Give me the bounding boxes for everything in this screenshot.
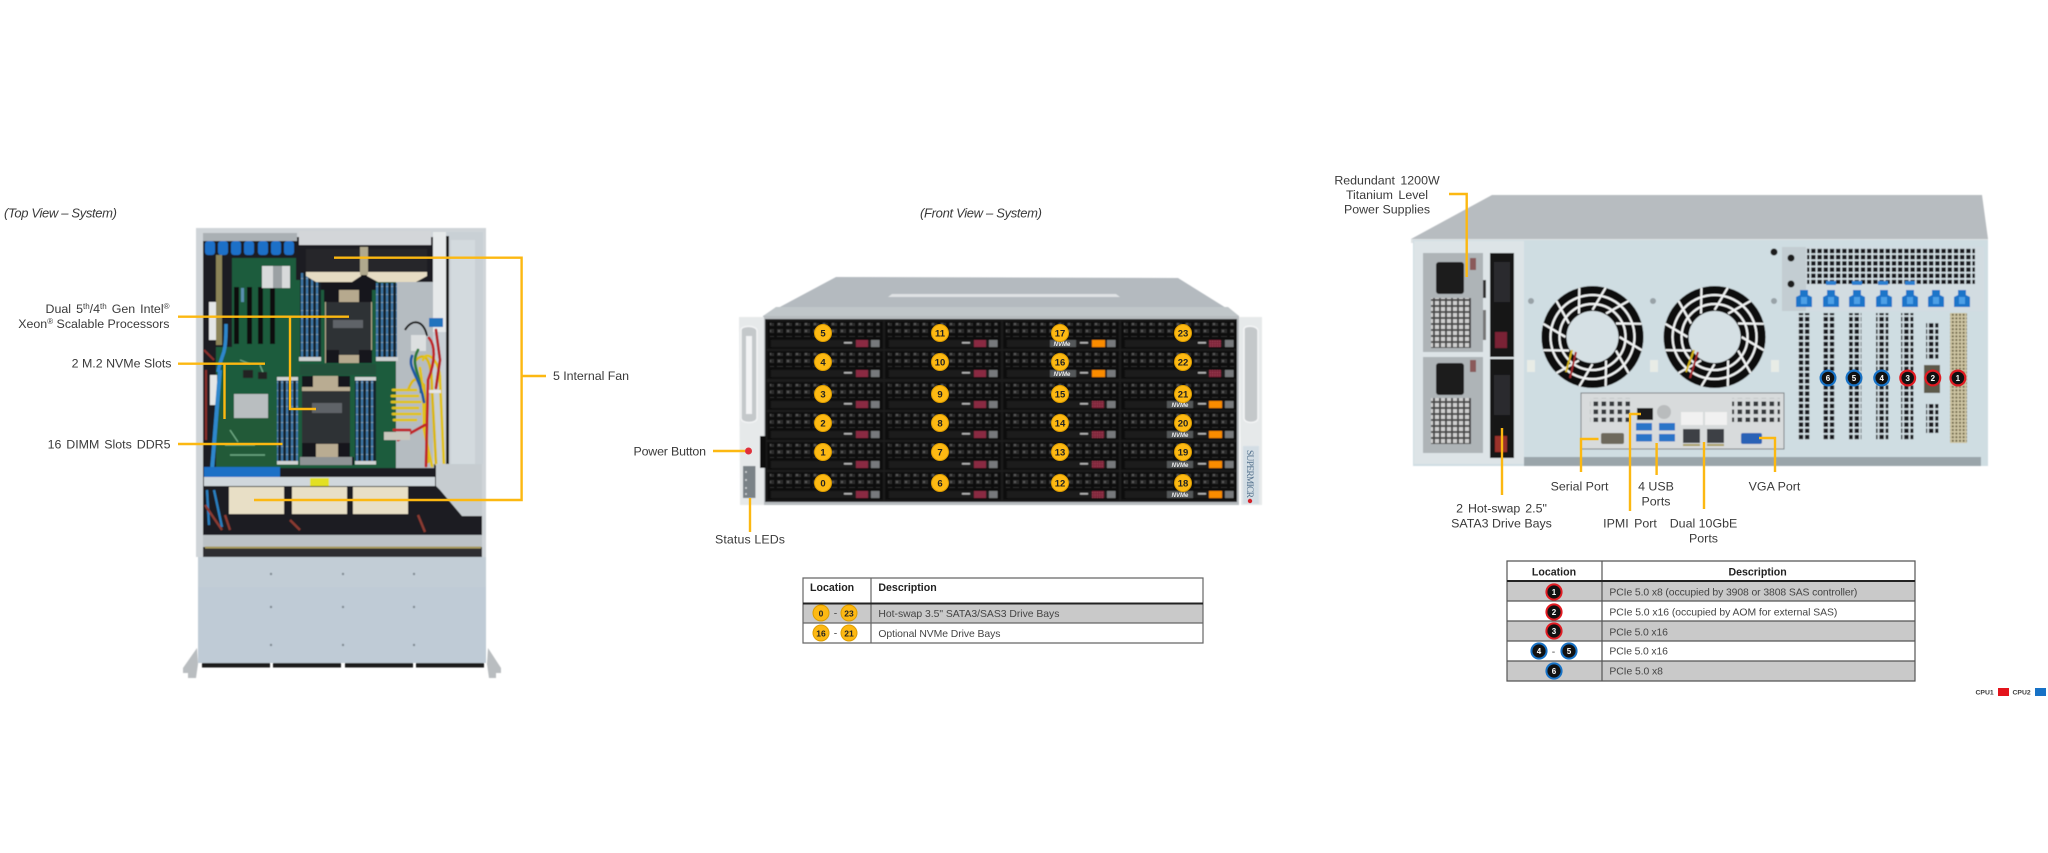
pcie numbers: 3 <box>1905 374 1910 383</box>
table: pcie slots <box>1507 561 1915 681</box>
callout: power button <box>634 444 752 458</box>
NVMe tags: NVMe <box>1054 342 1071 348</box>
heading: front view: (Front View – System) <box>920 206 1042 220</box>
pcie numbers: 2 <box>1931 374 1936 383</box>
backplane bar <box>203 535 482 547</box>
row: NVMe bays: 21 <box>844 628 854 638</box>
pcie numbers <box>1826 374 1961 383</box>
image: server interior top view <box>183 228 501 678</box>
callout: processors: Dual 5 <box>46 302 83 316</box>
table: pcie slots: Description <box>1728 566 1787 578</box>
psu side panel <box>1414 241 1524 464</box>
callout: IPMI port: IPMI Port <box>1603 516 1657 530</box>
drive numbers: 12 <box>1055 478 1065 490</box>
top blue pcie clips <box>205 241 294 255</box>
table: drive bays <box>803 578 1203 643</box>
NVMe tags: NVMe <box>1172 493 1189 499</box>
callout: power supplies <box>1334 173 1467 277</box>
callout: status LEDs: Status LEDs <box>715 532 785 546</box>
pcie numbers: 6 <box>1826 374 1831 383</box>
ears and feet <box>183 648 198 678</box>
image: server rear <box>1411 195 1988 466</box>
callout: processors: /4 <box>90 302 100 316</box>
io panel <box>1581 393 1784 449</box>
left cards and cables <box>216 255 222 345</box>
slot covers <box>1797 313 1809 440</box>
drive numbers: 15 <box>1055 390 1066 400</box>
screws and tabs <box>1528 298 1777 304</box>
callout: rear drive bays: SATA3 Drive Bays <box>1451 516 1552 530</box>
row 5 <box>1546 663 1663 679</box>
row 2: 2 <box>1552 608 1557 617</box>
legend: cpu colours <box>1976 688 2046 696</box>
callout: processors: th <box>83 302 90 311</box>
callout: power supplies: Power Supplies <box>1344 202 1430 216</box>
callout: processors: Scalable Processors <box>53 317 170 331</box>
callout: serial port: Serial Port <box>1551 479 1609 493</box>
motherboard <box>216 258 396 468</box>
callout: 5 internal fan <box>254 258 629 500</box>
NVMe tags: NVMe <box>1172 403 1189 409</box>
callout: USB ports: Ports <box>1642 494 1670 508</box>
callout: USB ports <box>1638 443 1674 508</box>
pcie slots <box>234 287 275 344</box>
blue strip and silver bar <box>204 467 280 477</box>
heading: top view: (Top View – System) <box>4 206 117 220</box>
bays <box>767 321 883 349</box>
table: drive bays: Description <box>878 582 937 594</box>
table: drive bays: Location <box>810 582 854 594</box>
callout: power supplies: Redundant 1200W <box>1334 173 1440 187</box>
row 3: 3 <box>1552 627 1557 636</box>
row 4: 5 <box>1567 647 1572 656</box>
drive numbers: 8 <box>937 418 943 430</box>
drive numbers: 4 <box>820 358 826 368</box>
callout: rear drive bays <box>1451 428 1552 530</box>
drive numbers: 14 <box>1055 418 1066 430</box>
NVMe tags: NVMe <box>1054 372 1071 378</box>
row 4 <box>1531 643 1668 659</box>
drive numbers: 10 <box>935 358 945 368</box>
drive numbers: 0 <box>820 478 826 490</box>
row 1 <box>1546 584 1857 600</box>
row 3: PCIe 5.0 x16 <box>1609 628 1668 639</box>
callout: status LEDs <box>715 498 785 546</box>
row 5: PCIe 5.0 x8 <box>1609 667 1663 678</box>
chipset / cover <box>262 266 290 288</box>
row 5: 6 <box>1552 667 1557 676</box>
drive numbers: 9 <box>937 390 943 400</box>
fans <box>1542 286 1644 388</box>
callout: 5 internal fan: 5 Internal Fan <box>553 369 629 383</box>
drive numbers: 13 <box>1055 448 1065 458</box>
row: hot-swap bays: 0 <box>819 608 824 618</box>
panel: top view <box>4 206 629 678</box>
drive numbers: 11 <box>935 328 946 340</box>
row: hot-swap bays: 23 <box>844 608 854 618</box>
callout: power button: Power Button <box>634 444 706 458</box>
left ear <box>739 317 764 505</box>
table: pcie slots: Location <box>1532 566 1576 578</box>
drive number badges <box>814 324 1192 492</box>
drive numbers <box>820 328 1189 490</box>
drive numbers: 2 <box>820 418 826 430</box>
drive numbers: 6 <box>937 478 943 490</box>
drive numbers: 20 <box>1178 418 1188 430</box>
callout: IPMI port <box>1603 414 1657 530</box>
callout: M.2 slots: 2 M.2 NVMe Slots <box>72 357 172 371</box>
rear hot-swap bays <box>1490 253 1514 357</box>
callout: VGA port: VGA Port <box>1749 479 1801 493</box>
image: server front <box>739 277 1262 505</box>
row: NVMe bays: - <box>834 628 837 640</box>
row 4: PCIe 5.0 x16 <box>1609 647 1668 658</box>
right ear <box>1239 317 1262 505</box>
right chassis panel <box>396 282 434 468</box>
row 3 <box>1546 623 1668 639</box>
drive numbers: 23 <box>1178 328 1188 340</box>
drive numbers: 17 <box>1055 328 1065 340</box>
row 1: 1 <box>1552 588 1557 597</box>
drive numbers: 21 <box>1178 390 1189 400</box>
legend: cpu colours: CPU1 <box>1976 690 1994 696</box>
callout: VGA port <box>1749 438 1801 493</box>
wedge <box>436 464 482 516</box>
pcie numbers: 5 <box>1852 374 1857 383</box>
NVMe tags: NVMe <box>1172 463 1189 469</box>
cpu 2 heatsink <box>302 376 350 458</box>
row 4: - <box>1552 647 1555 658</box>
callout: processors: ® <box>47 317 53 326</box>
callout: processors: Gen Intel <box>107 302 164 316</box>
panel: front view <box>634 206 1262 643</box>
drive numbers: 1 <box>820 448 826 458</box>
drive numbers: 19 <box>1178 448 1188 458</box>
pcie numbers: 1 <box>1956 374 1961 383</box>
row: NVMe bays <box>813 625 1000 641</box>
callout: USB ports: 4 USB <box>1638 479 1674 493</box>
front fans <box>229 487 284 514</box>
top right box <box>1782 247 1984 311</box>
brand dot <box>1248 499 1252 503</box>
row: NVMe bays: Optional NVMe Drive Bays <box>878 629 1000 640</box>
row: hot-swap bays <box>813 605 1059 621</box>
lid plate <box>198 557 486 663</box>
NVMe tags: NVMe <box>1172 433 1189 439</box>
callout: 10GbE ports <box>1670 442 1737 545</box>
sata module and cables <box>405 322 427 336</box>
row 2: PCIe 5.0 x16 (occupied by AOM for external SAS) <box>1609 608 1837 619</box>
blue pcie clips <box>1796 290 1812 307</box>
callout: 10GbE ports: Ports <box>1689 531 1718 545</box>
callout: serial port <box>1551 439 1609 493</box>
callout: processors <box>18 302 349 409</box>
callout: rear drive bays: 2 Hot-swap 2.5" <box>1456 501 1547 515</box>
callout: processors: Xeon <box>18 317 47 331</box>
cpu 1 heatsink <box>325 290 372 363</box>
pcie numbers: 4 <box>1879 374 1884 383</box>
row: hot-swap bays: - <box>834 608 837 620</box>
legend: cpu colours: CPU2 <box>2012 690 2031 696</box>
drive latches <box>856 340 986 498</box>
row: NVMe bays: 16 <box>816 628 826 638</box>
callout: power supplies: Titanium Level <box>1346 188 1428 202</box>
NVMe tags <box>1054 342 1189 499</box>
drive numbers: 5 <box>820 328 826 340</box>
rear fans <box>306 249 361 273</box>
row: hot-swap bays: Hot-swap 3.5" SATA3/SAS3 Drive Bays <box>878 609 1059 620</box>
callout: 10GbE ports: Dual 10GbE <box>1670 516 1737 530</box>
callout: M.2 slots <box>72 357 265 419</box>
brand: SUPERMICR <box>1244 450 1254 499</box>
drive numbers: 22 <box>1178 358 1188 368</box>
drive numbers: 18 <box>1178 478 1188 490</box>
row 1: PCIe 5.0 x8 (occupied by 3908 or 3808 SAS controller) <box>1609 588 1857 599</box>
row 4: 4 <box>1537 647 1542 656</box>
callout: processors: th <box>100 302 107 311</box>
face <box>763 316 1239 505</box>
row 2 <box>1546 604 1837 620</box>
rear top plate <box>299 231 431 245</box>
dimm banks <box>300 273 321 361</box>
drive numbers: 16 <box>1055 358 1065 368</box>
drive numbers: 3 <box>820 390 826 400</box>
panel: rear view <box>1334 173 2046 697</box>
pcie number badges <box>1821 371 1965 385</box>
callout: DIMM slots: 16 DIMM Slots DDR5 <box>48 437 171 451</box>
callout: processors: ® <box>164 302 170 311</box>
socket surround <box>321 272 376 290</box>
drive numbers: 7 <box>937 448 943 458</box>
